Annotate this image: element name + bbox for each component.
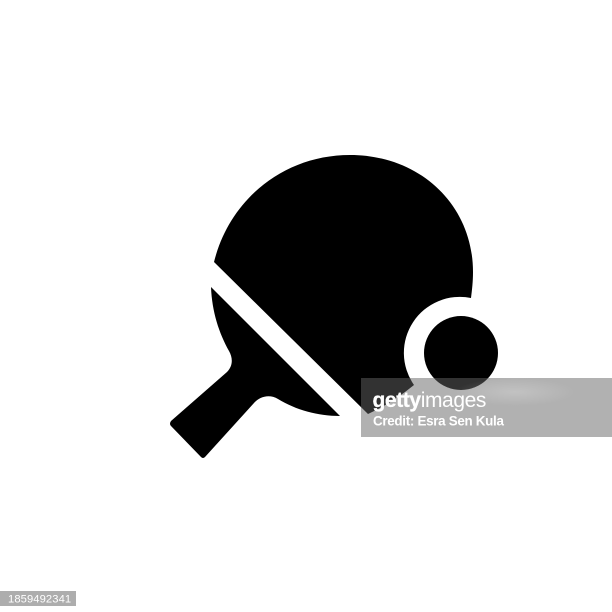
ball — [424, 316, 498, 390]
paddle head — [214, 155, 473, 414]
image id tag — [0, 591, 76, 606]
banner texture — [455, 378, 575, 406]
image id number: 1859492341 — [8, 594, 71, 606]
icon: table tennis paddle and ball — [170, 155, 498, 458]
wordmark: gettyimages — [372, 389, 486, 412]
tag background — [0, 591, 76, 606]
credit line: Credit: Esra Sen Kula — [373, 414, 504, 428]
paddle handle and lower rubber — [170, 287, 340, 458]
banner background — [361, 378, 612, 437]
watermark banner — [361, 378, 612, 437]
